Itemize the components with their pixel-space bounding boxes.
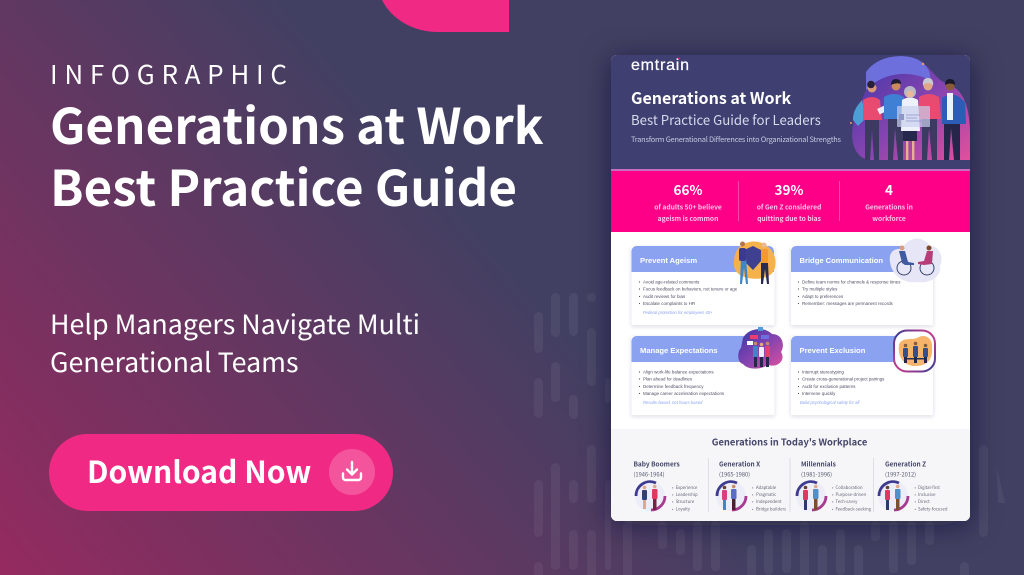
traits: •	[752, 499, 754, 505]
traits: •	[672, 506, 674, 512]
generation: millennials: Millennials	[801, 458, 836, 468]
traits: Adaptable	[756, 484, 777, 491]
icon: two figures	[878, 481, 908, 511]
stat 39%: quitting due to bias	[757, 213, 822, 223]
list: Try multiple styles	[802, 287, 838, 292]
traits	[914, 485, 948, 512]
subheading: Generational Teams	[50, 341, 299, 380]
list: Adapt to preferences	[802, 294, 844, 299]
panel: bridge communication	[791, 239, 942, 325]
list: Create cross-generational project pairings	[802, 377, 885, 382]
traits: •	[672, 499, 674, 505]
icon: two figures	[635, 481, 665, 511]
generation: millennials: (1981-1996)	[801, 470, 832, 478]
traits: Feedback-seeking	[836, 506, 872, 512]
illustration: wheelchair conversation	[890, 239, 942, 282]
person 5	[942, 79, 966, 160]
traits: Collaboration	[836, 484, 863, 491]
stat 39%	[757, 179, 822, 223]
traits: •	[752, 485, 754, 491]
icon: two figures	[716, 481, 746, 511]
panel: prevent exclusion: Prevent Exclusion	[800, 346, 866, 355]
icon: two figures	[796, 481, 826, 511]
icon: download	[329, 449, 375, 495]
list: Build psychological safety for all	[800, 400, 860, 405]
decorative bars	[534, 293, 1005, 575]
label: infographic: INFOGRAPHIC	[50, 55, 287, 92]
list: Remember: messages are permanent records	[802, 301, 894, 306]
list	[639, 280, 738, 315]
traits: Loyalty	[676, 506, 691, 512]
card header	[611, 55, 970, 169]
generation: generation x: Generation X	[719, 458, 760, 468]
list: Intervene quickly	[802, 391, 836, 396]
list: Escalate complaints to HR	[643, 301, 695, 306]
panel: prevent ageism: Prevent Ageism	[640, 256, 697, 265]
panel: generations	[611, 429, 970, 521]
traits: Safety-focused	[918, 506, 948, 512]
main heading: Best Practice Guide	[50, 150, 517, 221]
traits: Digital-first	[918, 485, 940, 491]
panel: manage expectations: Manage Expectations	[640, 346, 718, 355]
generation: generation z: (1997-2012)	[885, 470, 916, 478]
list: Align work-life balance expectations	[643, 370, 714, 375]
traits: Bridge builders	[756, 506, 786, 512]
traits: Structure	[676, 499, 695, 505]
generation: baby boomers: (1946-1964)	[634, 470, 665, 478]
traits: •	[672, 492, 674, 498]
traits	[832, 484, 872, 512]
list: Audit for exclusion patterns	[802, 384, 856, 389]
stats band	[611, 169, 970, 232]
card title: Generations at Work	[631, 85, 792, 109]
infographic preview card	[611, 55, 970, 521]
person 4	[918, 78, 941, 160]
main heading	[50, 88, 544, 221]
generation: generation z	[878, 458, 948, 512]
person 2	[884, 79, 905, 160]
traits: •	[914, 499, 916, 505]
list: Manage career acceleration expectations	[643, 391, 725, 396]
traits: •	[832, 499, 834, 505]
traits: •	[914, 485, 916, 491]
list: Focus feedback on behaviors, not tenure or age	[643, 287, 738, 292]
generation: millennials	[796, 458, 872, 512]
generations heading: Generations in Today's Workplace	[712, 434, 868, 448]
traits: Pragmatic	[756, 492, 777, 498]
stat 39%: of Gen Z considered	[757, 202, 821, 212]
download button: Download Now	[87, 448, 311, 492]
stat 66%: ageism is common	[658, 213, 718, 223]
main heading: Generations at Work	[50, 88, 544, 159]
list	[798, 280, 901, 306]
person 3	[901, 86, 920, 160]
panel: manage expectations	[632, 327, 783, 415]
traits	[752, 484, 786, 512]
list	[798, 370, 885, 405]
person 1	[863, 81, 888, 160]
panel: bridge communication: Bridge Communication	[800, 256, 883, 265]
list: Federal protection for employees 40+	[643, 310, 713, 315]
subheading: Help Managers Navigate Multi	[50, 303, 420, 342]
traits: •	[752, 492, 754, 498]
traits: •	[914, 492, 916, 498]
list: Define team norms for channels & response times	[802, 280, 901, 285]
traits: Purpose-driven	[836, 491, 866, 498]
traits: Inclusive	[918, 492, 936, 498]
traits: Experience	[676, 485, 698, 491]
list: Plan ahead for deadlines	[643, 377, 693, 382]
generation: baby boomers: Baby Boomers	[634, 458, 680, 468]
illustration: team of five	[850, 56, 970, 160]
list: Interrupt stereotyping	[802, 370, 844, 375]
generation: generation x: (1965-1980)	[719, 470, 750, 478]
generation: generation z: Generation Z	[885, 458, 926, 468]
traits: •	[832, 506, 834, 512]
list: Avoid age-related comments	[643, 280, 700, 285]
top pink shape	[382, 0, 509, 32]
list: Determine feedback frequency	[643, 384, 704, 389]
logo: emtrain	[631, 57, 689, 74]
traits: Direct	[918, 499, 930, 505]
panel: prevent ageism	[632, 242, 776, 325]
traits: •	[672, 485, 674, 491]
stat 66%: of adults 50+ believe	[654, 202, 722, 212]
traits	[672, 485, 698, 512]
tablet	[897, 106, 930, 127]
illustration: team with charts	[738, 327, 783, 369]
panel: prevent exclusion	[791, 330, 935, 415]
illustration: handshake	[734, 242, 776, 284]
stat 4: workforce	[872, 213, 906, 223]
stat 66%: 66%	[674, 179, 702, 199]
list: Results-based, not hours-based	[643, 400, 703, 405]
list	[639, 370, 725, 405]
traits: •	[914, 506, 916, 512]
traits: Tech-savvy	[836, 498, 858, 505]
subheading	[50, 303, 420, 380]
traits: Leadership	[676, 491, 698, 498]
traits: •	[832, 492, 834, 498]
stat 39%: 39%	[775, 179, 803, 199]
generation: generation x	[716, 458, 786, 512]
card tagline: Transform Generational Differences into Organizational Strengths	[631, 134, 842, 145]
generation: baby boomers	[634, 458, 698, 512]
traits: •	[752, 506, 754, 512]
illustration: meeting table	[894, 330, 935, 372]
stat 4: Generations in	[865, 202, 913, 212]
traits: •	[832, 485, 834, 491]
card subtitle: Best Practice Guide for Leaders	[631, 110, 821, 129]
list: Audit reviews for bias	[643, 294, 686, 299]
stat 4	[865, 179, 913, 223]
stat 66%	[654, 179, 722, 223]
stat 4: 4	[885, 179, 893, 199]
traits: Independent	[756, 498, 782, 505]
download button	[49, 434, 393, 511]
